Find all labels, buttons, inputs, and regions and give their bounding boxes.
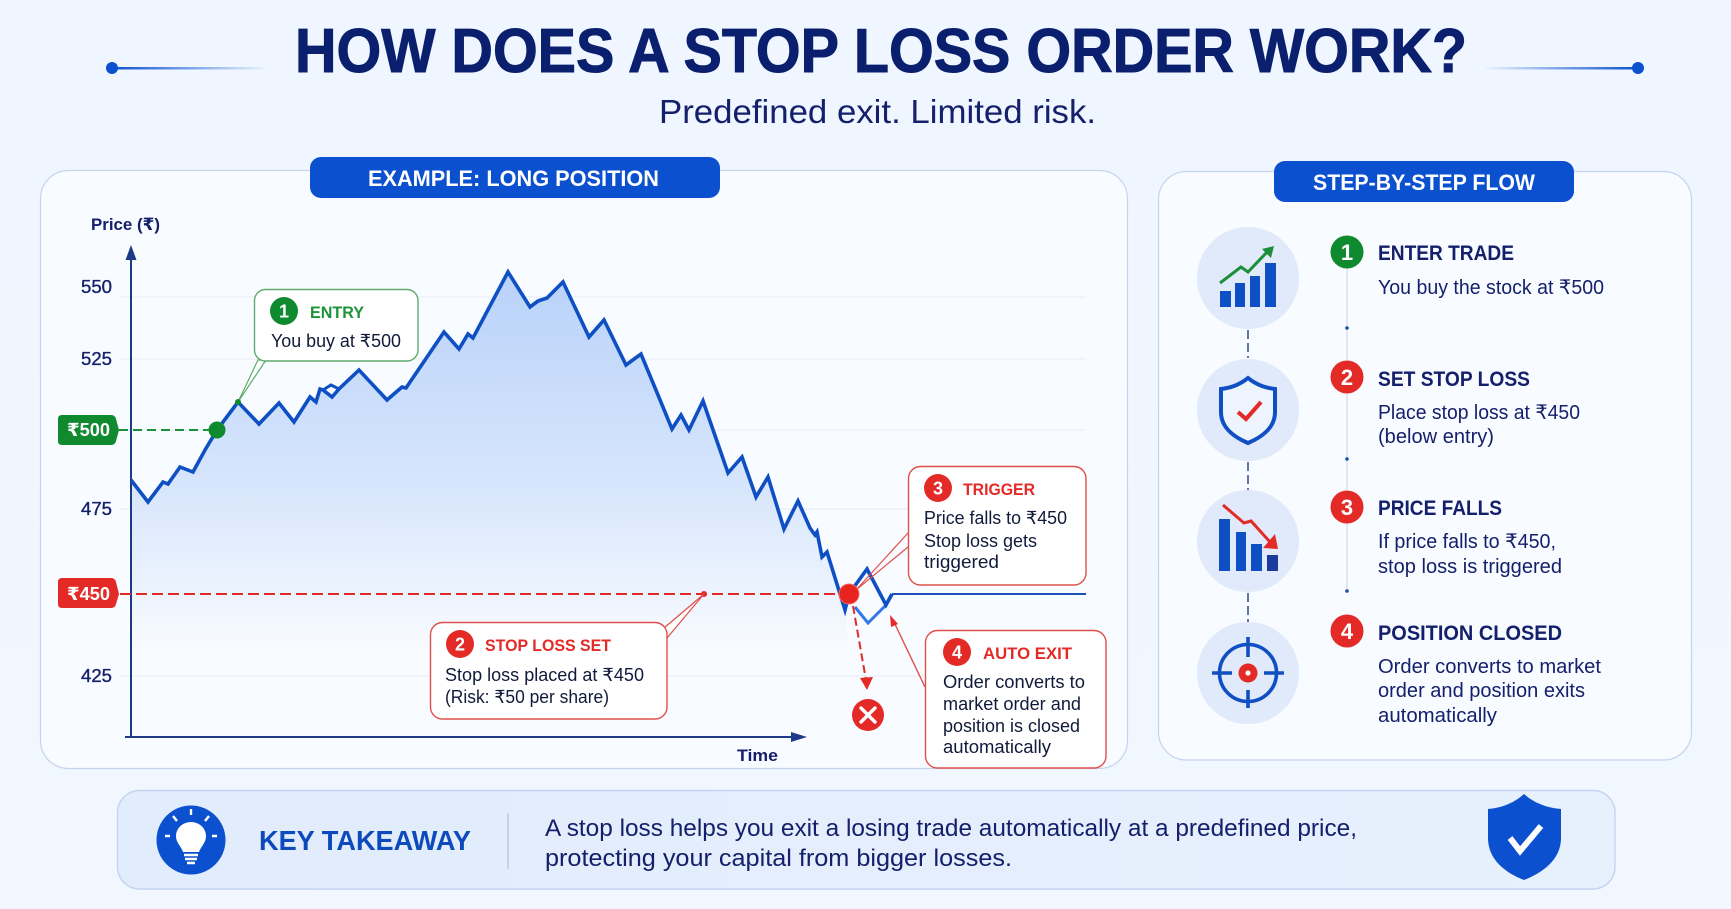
step 3: price falls: If price falls to ₹450, xyxy=(1378,531,1556,553)
step 1: enter trade: You buy the stock at ₹500 xyxy=(1378,277,1604,299)
y tick labels: 475 xyxy=(81,499,112,519)
step number 1 xyxy=(1330,236,1364,268)
callout: trigger: triggered xyxy=(924,552,999,572)
takeaway text: protecting your capital from bigger losses. xyxy=(545,845,1012,872)
callout: auto exit: Order converts to xyxy=(943,672,1085,692)
icon: rising bars xyxy=(1197,227,1299,329)
step 4: position closed xyxy=(1197,614,1601,727)
callout: trigger: Stop loss gets xyxy=(924,531,1037,551)
tag: 500 price: ₹500 xyxy=(67,420,110,440)
callout: auto exit: automatically xyxy=(943,737,1051,757)
step number 1: 1 xyxy=(1341,240,1353,265)
step 2: set stop loss xyxy=(1197,359,1580,461)
secondary price branch xyxy=(855,605,886,623)
axis label: time: Time xyxy=(737,746,778,765)
icon: shield check xyxy=(1197,359,1299,461)
step number 4 xyxy=(1330,614,1364,648)
tag: 500 price xyxy=(58,415,119,445)
panel: step-by-step flow xyxy=(1158,161,1692,760)
panel heading: flow xyxy=(1274,161,1574,202)
step 3: price falls: PRICE FALLS xyxy=(1378,497,1502,520)
y axis xyxy=(126,245,136,737)
icon: shield xyxy=(1488,794,1561,880)
arrow: auto exit leader xyxy=(890,615,925,687)
marker: trigger point xyxy=(839,584,859,604)
stop loss dashed line xyxy=(120,593,850,595)
header decoration: left line xyxy=(106,62,269,74)
y tick labels: 525 xyxy=(81,349,112,369)
step 1: enter trade xyxy=(1197,227,1604,329)
callout: stop loss set: (Risk: ₹50 per share) xyxy=(445,687,609,707)
label: key takeaway: KEY TAKEAWAY xyxy=(259,825,471,856)
callout: auto exit: market order and xyxy=(943,694,1081,714)
axis label: price: Price (₹) xyxy=(91,215,160,234)
callout: stop loss set: STOP LOSS SET xyxy=(485,636,612,655)
step 4: position closed: order and position exits xyxy=(1378,680,1585,702)
header decoration: right line xyxy=(1483,62,1644,74)
y tick labels: 425 xyxy=(81,666,112,686)
step 2: set stop loss: (below entry) xyxy=(1378,426,1494,448)
panel heading: example: EXAMPLE: LONG POSITION xyxy=(368,166,659,191)
step number 4: 4 xyxy=(1341,619,1354,644)
callout: auto exit xyxy=(926,630,1106,768)
key takeaway bar xyxy=(118,790,1615,889)
tag: 450 price: ₹450 xyxy=(67,584,110,604)
callout: entry: You buy at ₹500 xyxy=(271,331,401,351)
callout: trigger: TRIGGER xyxy=(963,480,1035,499)
tag: 450 price xyxy=(58,578,119,608)
panel heading: example xyxy=(310,157,720,198)
icon: falling bars xyxy=(1197,490,1299,592)
price chart xyxy=(81,215,1086,765)
panel: example long position xyxy=(40,157,1128,768)
x axis xyxy=(125,732,807,742)
step 2: set stop loss: Place stop loss at ₹450 xyxy=(1378,402,1580,424)
icon: exit cross xyxy=(852,699,884,731)
icon: light bulb xyxy=(156,806,226,874)
subtitle: Predefined exit. Limited risk. xyxy=(659,93,1096,130)
callout: trigger xyxy=(856,466,1086,590)
step number 2 xyxy=(1330,360,1364,394)
callout: stop loss set: Stop loss placed at ₹450 xyxy=(445,665,644,685)
icon: target xyxy=(1197,622,1299,724)
panel heading: flow: STEP-BY-STEP FLOW xyxy=(1313,170,1536,195)
callout: entry: 1 xyxy=(279,302,289,322)
callout: auto exit: 4 xyxy=(952,642,962,662)
takeaway text xyxy=(545,815,1357,872)
entry level dashed line xyxy=(119,429,215,431)
marker: entry point xyxy=(208,422,226,438)
callout: entry: ENTRY xyxy=(310,303,365,322)
step number 2: 2 xyxy=(1341,365,1353,390)
y tick labels xyxy=(81,277,112,686)
step 3: price falls xyxy=(1197,490,1562,592)
callout: trigger: 3 xyxy=(933,478,943,498)
step number 3: 3 xyxy=(1341,495,1353,520)
takeaway text: A stop loss helps you exit a losing trade automatically at a predefined price, xyxy=(545,815,1357,842)
step 4: position closed: Order converts to market xyxy=(1378,656,1601,678)
step number 3 xyxy=(1330,490,1364,524)
price area fill xyxy=(131,272,849,650)
step 4: position closed: automatically xyxy=(1378,705,1497,727)
exit flat line xyxy=(892,593,1086,595)
callout: auto exit: position is closed xyxy=(943,716,1080,736)
callout: stop loss set xyxy=(430,591,707,719)
step 1: enter trade: ENTER TRADE xyxy=(1378,242,1514,265)
y tick labels: 550 xyxy=(81,277,112,297)
callout: auto exit: AUTO EXIT xyxy=(983,644,1073,663)
callout: trigger: Price falls to ₹450 xyxy=(924,508,1067,528)
callout: stop loss set: 2 xyxy=(455,634,465,654)
step 4: position closed: POSITION CLOSED xyxy=(1378,622,1562,645)
step 2: set stop loss: SET STOP LOSS xyxy=(1378,368,1530,391)
title: HOW DOES A STOP LOSS ORDER WORK? xyxy=(295,17,1467,86)
arrow: exit drop xyxy=(853,606,873,690)
callout: entry xyxy=(235,290,418,405)
price line xyxy=(131,272,892,610)
step 3: price falls: stop loss is triggered xyxy=(1378,556,1562,578)
